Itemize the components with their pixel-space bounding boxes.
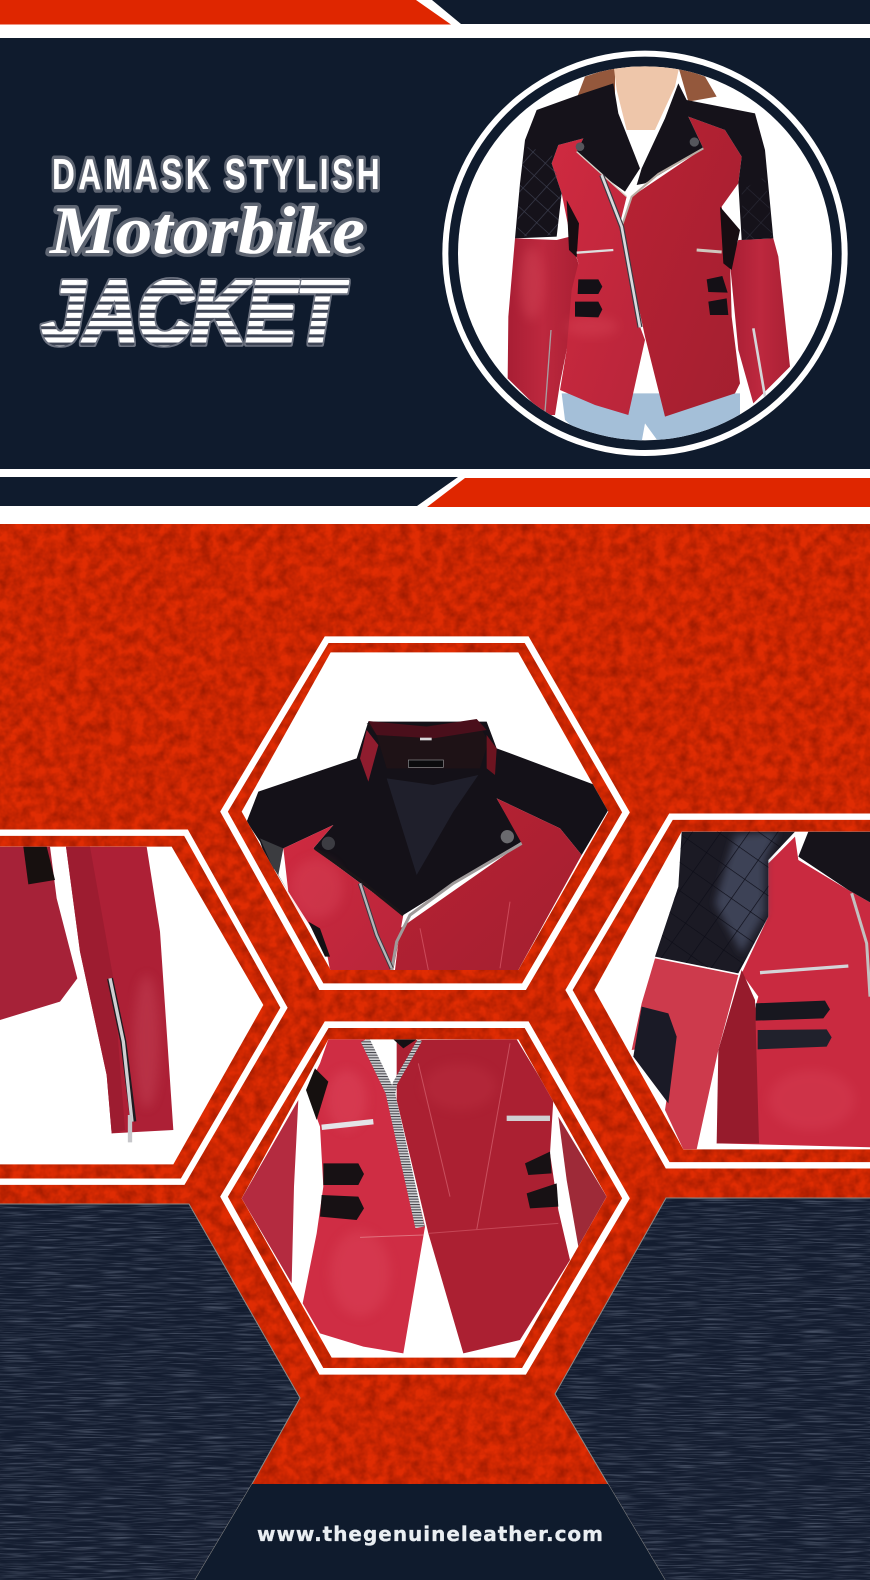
textured navy panels xyxy=(0,1190,870,1580)
title line: Motorbike: Motorbike xyxy=(49,192,365,268)
bottom banner strip xyxy=(0,477,870,507)
top banner strip xyxy=(0,0,870,40)
circular jacket photo xyxy=(442,51,848,456)
title line: Damask Stylish: DAMASK STYLISH xyxy=(52,150,380,199)
hexagon photo: collar xyxy=(224,640,626,987)
header panel xyxy=(0,38,870,469)
red textured panel xyxy=(0,524,870,1484)
hexagon photo: sleeve zip xyxy=(0,833,284,1182)
hexagon photo: shoulder quilting xyxy=(569,817,870,1165)
footer panel xyxy=(195,1484,665,1580)
title xyxy=(42,150,380,362)
title line: Jacket: JACKET xyxy=(42,262,348,362)
website url: www.thegenuineleather.com xyxy=(257,1522,603,1546)
hexagon photo: front waist xyxy=(224,1025,626,1371)
